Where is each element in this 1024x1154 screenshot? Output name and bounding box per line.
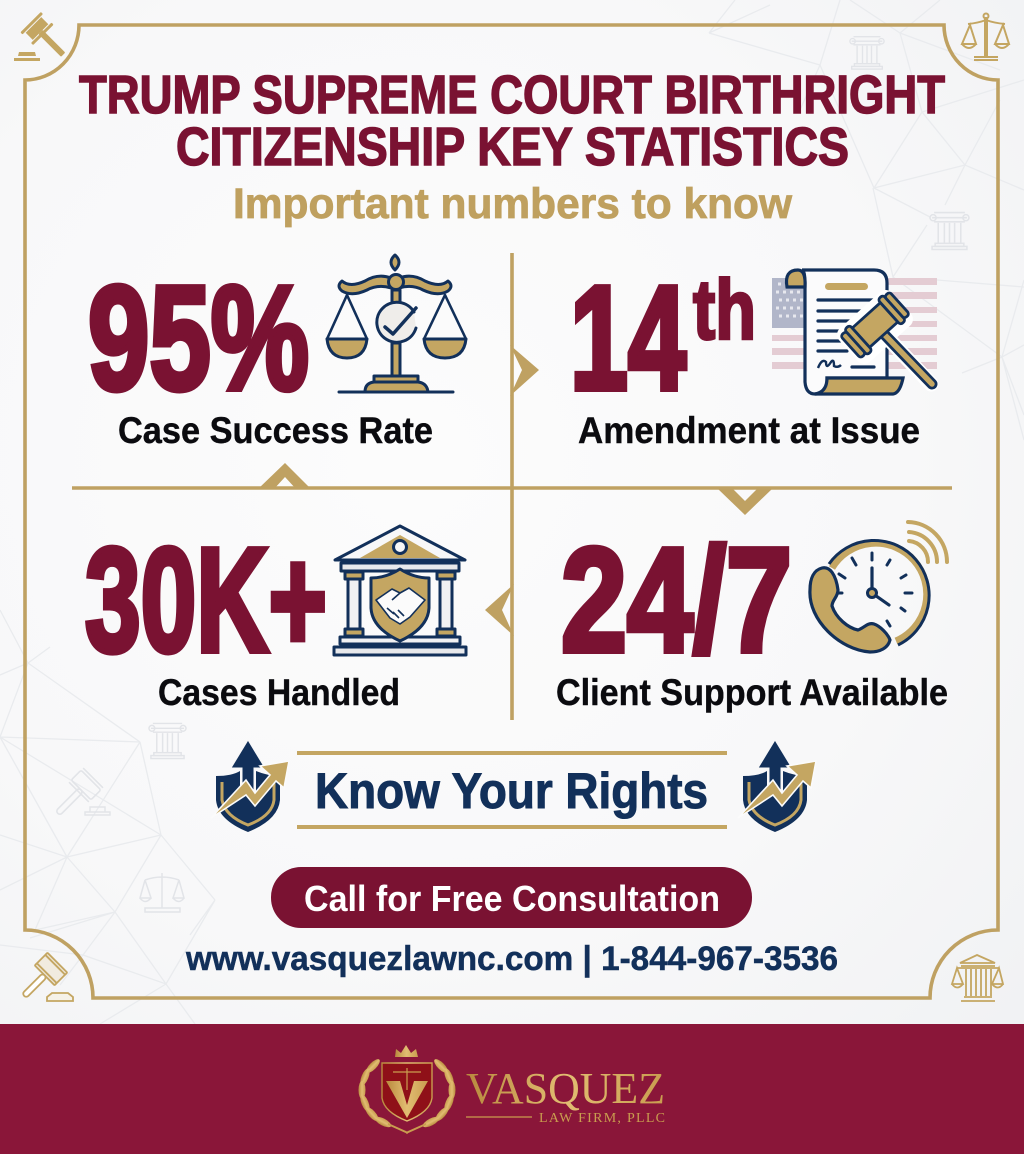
label: case success rate: Case Success Rate xyxy=(118,410,433,451)
stat: 14th: 14 xyxy=(570,256,686,421)
ghost icon: column left xyxy=(149,723,186,759)
corner icon: scales top right xyxy=(962,14,1009,60)
logo crown xyxy=(395,1045,418,1057)
stat: 14th: th xyxy=(693,263,756,357)
subtitle: Important numbers to know xyxy=(233,180,793,228)
call to action button: Call for Free Consultation xyxy=(304,878,720,919)
label: amendment at issue: Amendment at Issue xyxy=(578,410,920,451)
footer band xyxy=(0,1024,1024,1154)
icon: scales with check xyxy=(327,255,466,392)
ghost icon: gavel base xyxy=(85,807,110,815)
dividers xyxy=(72,253,952,720)
contact line: www.vasquezlawnc.com | 1-844-967-3536 xyxy=(185,940,838,978)
icon: flag, document and gavel xyxy=(772,270,937,394)
banner heading: Know Your Rights xyxy=(315,763,708,819)
label: cases handled: Cases Handled xyxy=(158,672,400,713)
icon: shield with arrows right xyxy=(738,740,816,832)
ghost icon: column right xyxy=(930,213,969,249)
title xyxy=(79,65,945,177)
ghost icon: gavel xyxy=(48,768,103,823)
footer logo xyxy=(358,1045,665,1133)
logo wreath right xyxy=(406,1057,456,1133)
corner icon: gavel top left xyxy=(14,12,73,65)
ghost icon: scales xyxy=(140,873,184,912)
corner icon: gavel bottom left xyxy=(14,953,73,1006)
stat: 24/7: 24/7 xyxy=(561,518,792,683)
stat: 95%: 95% xyxy=(88,256,309,421)
title: CITIZENSHIP KEY STATISTICS xyxy=(176,117,849,177)
logo wreath left xyxy=(358,1057,408,1133)
stat: 30K+: 30K+ xyxy=(85,518,327,683)
icon: courthouse with shield and handshake xyxy=(334,526,466,655)
logo shield xyxy=(382,1063,432,1121)
icon: shield with arrows left xyxy=(211,740,289,832)
logo subtitle: LAW FIRM, PLLC xyxy=(539,1111,665,1126)
banner lines xyxy=(297,753,727,827)
icon: clock and phone xyxy=(810,522,947,652)
ghost icon: column top right xyxy=(850,37,884,69)
label: client support available: Client Support Available xyxy=(556,672,948,713)
corner icon: temple scales bottom right xyxy=(952,955,1003,1001)
call to action button xyxy=(271,867,752,928)
chevron arrows xyxy=(258,345,772,636)
logo name: VASQUEZ xyxy=(466,1064,665,1113)
